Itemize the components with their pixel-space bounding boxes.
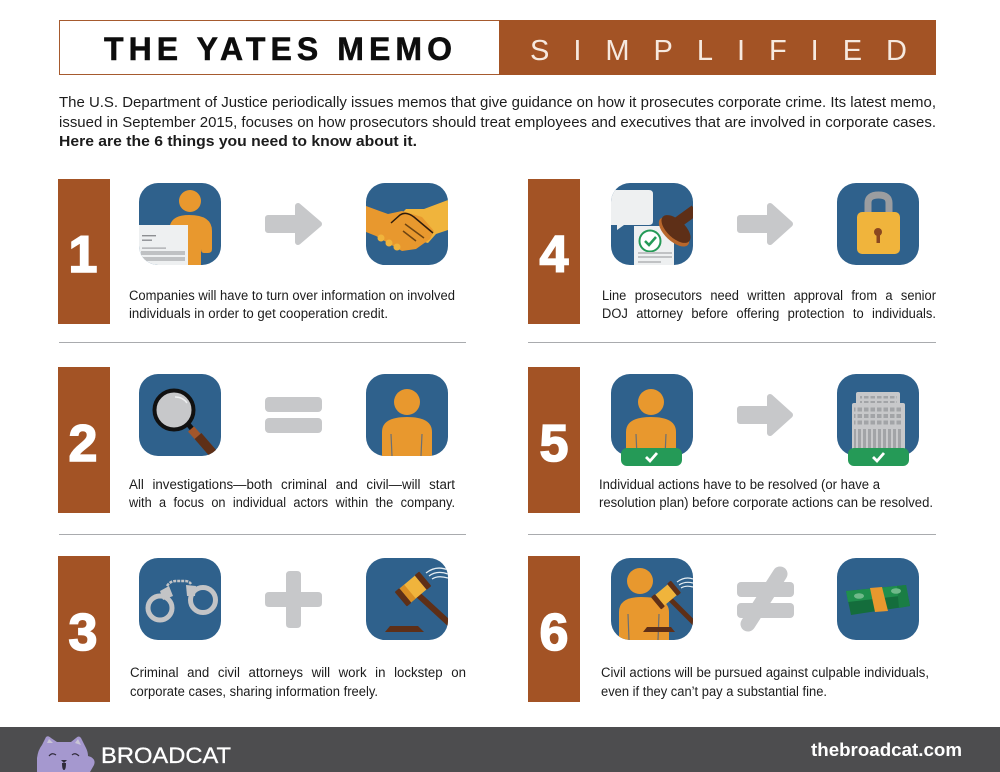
icon: person with document [139,183,221,265]
not-equal sign [737,574,794,624]
arrow [740,397,790,433]
panel: item 6 [528,556,929,702]
description: with a focus on individual actors within the company. [128,495,455,510]
intro text: issued in September 2015, focuses on how prosecutors should treat employees and executives that are involved in corporate cases. [59,114,936,131]
description: DOJ attorney before offering protection to individuals. [602,306,936,321]
plus sign [265,571,322,628]
number 2: 2 [69,415,97,473]
icon: person resolved [611,374,693,466]
description: Criminal and civil attorneys will work in lockstep on [130,665,466,680]
title: THE YATES MEMO [104,31,452,67]
panel: item 3 [58,556,466,702]
panel: item 5 [528,367,933,513]
icon: gavel [366,558,450,640]
icon: magnifying glass [139,374,221,458]
description: resolution plan) before corporate actions can be resolved. [599,495,933,510]
description: All investigations—both criminal and civil—will start [129,477,455,492]
description [130,665,466,699]
logo wordmark: BROADCAT [101,743,231,768]
description: even if they can’t pay a substantial fine. [601,684,827,699]
description [599,477,933,510]
description: Civil actions will be pursued against culpable individuals, [601,665,929,680]
website url: thebroadcat.com [811,740,962,760]
description: corporate cases, sharing information freely. [130,684,378,699]
description: Companies will have to turn over information on involved [129,288,455,303]
icon: person [366,374,448,456]
intro text [59,94,936,150]
description: individuals in order to get cooperation credit. [129,306,388,321]
icon: handcuffs [139,558,221,640]
number 6 [528,556,580,702]
description [602,288,936,321]
icon: handshake [366,183,448,265]
description [128,477,455,510]
subtitle: SIMPLIFIED [530,35,907,67]
number 5: 5 [540,415,568,473]
number 1: 1 [69,226,97,284]
number 2 [58,367,110,513]
icon: person with gavel [611,558,695,640]
icon: padlock [837,183,919,265]
number 4 [528,179,580,324]
icon: approval stamp [609,183,695,266]
description: Line prosecutors need written approval from a senior [602,288,936,303]
number 4: 4 [540,226,569,284]
panel: item 4 [528,179,936,324]
arrow [268,206,319,242]
number 6: 6 [540,604,568,662]
number 3 [58,556,110,702]
icon: broadcat logo cat [37,736,95,772]
footer bar [0,727,1000,772]
intro text: The U.S. Department of Justice periodically issues memos that give guidance on how it prosecutes corporate crime. Its latest memo, [59,94,936,111]
description: Individual actions have to be resolved (or have a [599,477,880,492]
arrow [740,206,790,242]
panel: item 2 [58,367,455,513]
number 5 [528,367,580,513]
number 3: 3 [69,604,97,662]
icon: building resolved [837,374,919,466]
panel: item 1 [58,179,455,324]
header: title banner [60,20,936,75]
intro text: Here are the 6 things you need to know about it. [59,133,417,150]
description [601,665,929,699]
icon: stack of money [837,558,919,640]
number 1 [58,179,110,324]
description [129,288,455,321]
equals sign [265,397,322,433]
